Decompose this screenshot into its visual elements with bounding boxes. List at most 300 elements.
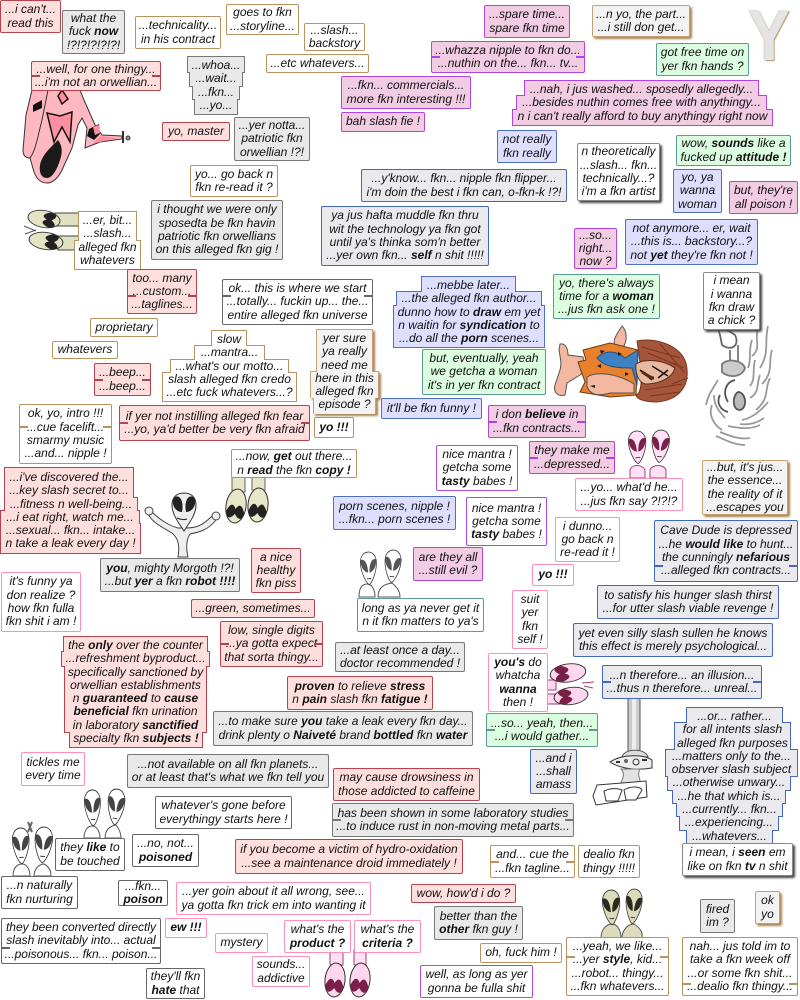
bubble: technicality: in his contract (141, 32, 215, 46)
bubble: mebbe later: ...mebbe later... (427, 278, 510, 292)
bubble: n theoretically: technically...? (583, 171, 654, 185)
bubble: hate that (146, 968, 205, 999)
bubble: go back re-read: fkn re-read it ? (195, 180, 273, 194)
bubble: long as ya (357, 598, 484, 632)
bubble: ew (165, 918, 207, 938)
bubble: draw a chick: fkn draw (709, 300, 754, 314)
bubble: gone before (155, 796, 292, 829)
tower machine with hands (593, 695, 652, 805)
bubble: green sometimes (191, 599, 315, 618)
bubble: slash backstory: backstory (309, 36, 360, 50)
bubble: yer sure (310, 329, 383, 418)
bubble: slash backstory (304, 23, 365, 51)
bubble: week off: nah... jus told im to (690, 939, 790, 953)
bubble: bah slash fie (341, 112, 425, 132)
bubble: what the fuck now: fuck now (69, 24, 118, 38)
bubble: whoa wait fkn yo: ...fkn... (198, 85, 234, 99)
bubble: what the fuck now: what the (71, 11, 116, 25)
bubble: i dunno re-read: i dunno... (563, 519, 612, 533)
bubble: er bit slash alleged: whatevers (80, 253, 135, 267)
bubble: nice mantra second (466, 497, 547, 546)
bubble: suit yer fkn self: yer (522, 605, 538, 619)
bubble: an illusion: ...n therefore... an illusion... (610, 668, 754, 682)
bubble: what's the product: product ? (290, 936, 345, 950)
bubble: or rather whatevers: ...or... rather... (697, 709, 772, 723)
bubble: sounds like attitude: fucked up attitude ! (680, 150, 787, 164)
bubble: nice mantra second: tasty babes ! (471, 527, 542, 541)
bubble: we like yer style (566, 937, 669, 996)
bubble: yo ya wanna woman: yo, ya (681, 170, 714, 184)
bubble: funny fulla shit (1, 572, 81, 632)
bubble: not really (497, 130, 557, 163)
bubble: not available: or at least that's what we fkn tell you (132, 770, 324, 784)
bubble: how'd i do: wow, how'd i do ? (417, 886, 510, 900)
bubble: ok yo intro: ...cue facelift... (27, 420, 104, 434)
bubble: time for a woman: ...jus fkn ask one ! (558, 302, 655, 316)
bubble: time for a woman: time for a woman (559, 289, 654, 303)
bubble: n yo the part (592, 5, 690, 37)
bubble: essence escapes: the essence... (708, 473, 782, 487)
bubble: etc whatevers: ...etc whatevers... (270, 56, 365, 70)
gray aliens pair (359, 549, 402, 597)
bubble: not available: ...not available on all fkn planets... (138, 757, 318, 771)
bubble: not really: not really (503, 132, 551, 146)
bubble: too many taglines (127, 269, 197, 314)
bubble: like to be touched: be touched (60, 854, 120, 868)
bubble: ok yo intro (19, 404, 112, 464)
bubble: sounds addictive (252, 956, 310, 987)
bubble: week off: ...or some fkn shit... (688, 966, 792, 980)
bubble: beep beep: ...beep... (99, 365, 146, 379)
bubble: suit yer fkn self (512, 590, 548, 649)
bubble: trick em: ...yer goin about it all wrong, see... (182, 884, 365, 898)
bubble: got free time (656, 43, 749, 76)
bubble: suit yer fkn self: suit (521, 592, 539, 606)
bubble: yer notta patriotic: ...yer notta... (239, 118, 305, 132)
bubble: cave dude depressed: Cave Dude is depressed (660, 523, 792, 537)
bubble: key slash secret: ...i eat right, watch me... (6, 510, 134, 524)
bubble: yer sure: ya really (322, 344, 367, 358)
bubble: whoa wait fkn yo: ...yo... (200, 98, 232, 112)
bubble: n theoretically: n theoretically (581, 144, 656, 158)
bubble: we like yer style: ...yeah, we like... (573, 939, 662, 953)
bubble: what's the product: what's the (291, 922, 344, 936)
bubble: fkn poison: ...fkn... (125, 879, 161, 893)
bubble: believe in contracts (488, 405, 586, 438)
bubble: refreshment byproduct: ...refreshment byproduct... (65, 651, 206, 665)
bubble: not an orwellian: ...i'm not an orwellian... (35, 75, 157, 89)
bubble: converted into poison (1, 918, 161, 964)
bubble: so right now: right... (579, 241, 612, 255)
bubble: proven stress (287, 676, 433, 710)
bubble: not anymore: not anymore... er, wait (632, 221, 751, 235)
bubble: fulla shit (420, 965, 533, 998)
bubble: yo ya wanna woman (673, 169, 722, 213)
bubble: like to be touched: they like to (60, 840, 120, 854)
bubble: yo ya wanna woman: wanna (680, 183, 715, 197)
bubble: make me depressed: they make me (534, 443, 610, 457)
bubble: essence escapes: the reality of it (708, 486, 782, 500)
bubble: or rather whatevers: for all intents slash (683, 722, 782, 736)
bubble: too many taglines: ...taglines... (131, 297, 193, 311)
caveman lying down (555, 326, 688, 402)
scribbled upside-down face (706, 326, 772, 445)
bubble: spare time: ...spare time... (489, 7, 565, 21)
bubble: long as ya: n it fkn matters to ya's (362, 614, 479, 628)
bubble: whatcha wanna: then ! (503, 695, 533, 709)
bubble: yer sure: need me (321, 358, 368, 372)
bubble: funny fulla shit: fkn shit i am ! (6, 614, 76, 628)
bubble: seen em on tv: i mean, i seen em (689, 845, 786, 859)
bubble: time for a woman (553, 274, 660, 319)
bubble: whatevers (52, 341, 118, 359)
bubble: essence escapes: ...escapes you (706, 500, 784, 514)
beige legs hanging (224, 476, 269, 524)
bubble: cue the tagline: ...fkn tagline... (495, 860, 570, 874)
bubble: ew: ew !!! (170, 920, 202, 934)
bubble: all poison: but, they're (734, 183, 793, 197)
bubble: so right now (574, 228, 617, 269)
bubble: mebbe later: ...do all the porn scenes... (399, 331, 539, 345)
bubble: nah i jus washed: n i can't really afford to buy anythingy right now (518, 109, 767, 123)
bubble: too many taglines: too... many (132, 271, 192, 285)
bubble: proprietary (90, 318, 158, 337)
bubble: dealio thingy: thingy !!!!! (583, 860, 635, 874)
bubble: fulla shit: well, as long as yer (425, 967, 528, 981)
beige feet upper left (24, 208, 80, 252)
bubble: yer sure: alleged fkn (315, 384, 374, 398)
bubble: nah i jus washed: ...besides nuthin comes free with anythingy... (522, 95, 761, 109)
bubble: merely psychological: yet even silly slash sullen he knows (579, 626, 767, 640)
bubble: may cause drowsiness: may cause drowsiness in (339, 770, 474, 784)
bubble: fired im (700, 899, 735, 933)
bubble: essence escapes: ...but, it's jus... (707, 460, 783, 474)
bubble: or rather whatevers: observer slash subject (672, 762, 791, 776)
bubble: goes to storyline (226, 4, 299, 35)
bubble: mebbe later (393, 276, 545, 348)
bubble: healthy piss: a nice (260, 550, 292, 564)
bubble: ok yo tan (755, 891, 780, 924)
bubble: proven stress: n pain slash fkn fatigue ! (292, 692, 428, 706)
bubble: refreshment byproduct: orwellian establishments (70, 678, 201, 692)
bubble: ok yo tan: ok (761, 893, 774, 907)
bubble: refreshment byproduct (61, 636, 210, 748)
bubble: nice mantra first (436, 445, 518, 491)
bubble: whatcha wanna: you's do (494, 655, 542, 669)
bubble: an illusion (602, 665, 762, 699)
bubble: yo master: yo, master (168, 124, 224, 138)
bubble: got free time: yer fkn hands ? (661, 58, 744, 72)
bubble: naturally nurturing (1, 876, 78, 909)
bubble: goes to storyline: goes to fkn (233, 5, 292, 19)
bubble: dealio thingy (578, 845, 640, 878)
bubble: or rather whatevers: ...whatevers... (692, 829, 767, 843)
bubble: cue the tagline (490, 845, 575, 878)
bubble: patriotic orwellians: i thought we were only (157, 202, 277, 216)
bubble: oh fuck him (480, 943, 562, 963)
bubble: instilling fear (119, 405, 310, 441)
bubble: porn scenes nipple: ...fkn... porn scenes ! (339, 512, 450, 526)
bubble: nice mantra first: nice mantra ! (442, 447, 512, 461)
bubble: n theoretically (577, 143, 660, 201)
bubble: take a leak (213, 711, 473, 746)
bubble: hydro-oxidation (235, 839, 463, 874)
bubble: week off (682, 937, 798, 996)
bubble: cave dude depressed: ...he would like to hunt... (659, 537, 793, 551)
bubble: instilling fear: if yer not instilling alleged fkn fear (126, 409, 303, 423)
bubble: so yeah then: ...so... yeah, then... (491, 716, 593, 730)
bubble: so yeah then (486, 713, 598, 747)
bubble: technicality (135, 16, 221, 49)
bubble: cave dude depressed (654, 520, 798, 582)
pink feet sideways (540, 662, 594, 707)
bubble: satisfy hunger: to satisfy his hunger slash thirst (604, 588, 772, 602)
bubble: long as ya: long as ya never get it (362, 601, 479, 615)
bubble: commercials: ...fkn... commercials... (348, 78, 464, 92)
bubble: getcha a woman: we getcha a woman (431, 364, 537, 378)
bubble: converted into poison: ...poisonous... fkn... poison... (5, 947, 157, 961)
bubble: cave dude depressed: the cunningly nefarious (662, 550, 790, 564)
bubble: patriotic orwellians: on this alleged fkn gig ! (156, 242, 278, 256)
bubble: fkn poison (118, 880, 168, 906)
bubble: dealio thingy: dealio fkn (583, 847, 635, 861)
bubble: better than other: other fkn guy ! (439, 922, 518, 936)
bubble: porn scenes nipple (333, 496, 456, 530)
bubble: yo pink: yo !!! (538, 567, 568, 581)
bubble: getcha a woman (422, 349, 546, 395)
bubble: fulla shit: gonna be fulla shit (428, 980, 525, 994)
bubble: technicality: ...technicality... (139, 18, 217, 32)
bubble: no not poisoned: ...no, not... (137, 836, 194, 850)
bubble: suit yer fkn self: self ! (517, 632, 543, 646)
bubble: or rather whatevers: ...he that which is... (678, 789, 780, 803)
bubble: where we start: entire alleged fkn universe (227, 308, 368, 322)
bubble: draw a chick: i mean (713, 273, 750, 287)
bubble: green sometimes: ...green, sometimes... (195, 601, 311, 615)
bubble: draw a chick (703, 272, 760, 330)
aliens pair lower left (12, 822, 53, 876)
bubble: trick em: ya gotta fkn trick em into wanting it (181, 898, 366, 912)
bubble: mighty morgoth: you, mighty Morgoth !?! (106, 561, 234, 575)
bubble: sounds addictive: addictive (257, 970, 305, 984)
bubble: suit yer fkn self: fkn (522, 618, 538, 632)
bubble: where we start: ...totally... fuckin up... the... (227, 294, 368, 308)
bubble: key slash secret: ...key slash secret to... (9, 483, 129, 497)
pink legs hanging bottom (323, 950, 372, 998)
bubble: healthy piss (251, 548, 301, 593)
bubble: slow mantra: ...etc fuck whatevers...? (166, 385, 293, 399)
bubble: tickles me: tickles me (26, 755, 80, 769)
bubble: slow mantra: ...what's our motto... (176, 359, 283, 373)
bubble: patriotic orwellians: patriotic fkn orwellians (158, 229, 276, 243)
bubble: ok yo tan: yo (761, 906, 774, 920)
bubble: where we start: ok... this is where we start (228, 281, 367, 295)
bubble: and i shall amass: ...shall (536, 764, 571, 778)
bubble: sounds like attitude: wow, sounds like a (681, 136, 786, 150)
bubble: er bit slash alleged: alleged fkn (78, 240, 137, 254)
bubble: whazza nipple (431, 41, 585, 73)
bubble: nice mantra first: getcha some (443, 460, 511, 474)
bubble: satisfy hunger: ...for utter slash viable revenge ! (603, 601, 773, 615)
bubble: hydro-oxidation: ...see a maintenance droid immediately ! (241, 856, 457, 870)
bubble: fkn funny: it'll be fkn funny ! (387, 401, 476, 415)
bubble: yer sure: yer sure (323, 331, 366, 345)
bubble: ok yo intro: smarmy music (27, 433, 104, 447)
bubble: take a leak: drink plenty o Naiveté brand bottled fkn water (219, 728, 467, 742)
bubble: mighty morgoth: ...but yer a fkn robot !!!! (105, 574, 235, 588)
bubble: beep beep (94, 363, 151, 396)
bubble: we like yer style: ...yer style, kid... (573, 952, 662, 966)
bubble: not anymore (625, 219, 758, 265)
bubble: muddle thru: ...yer own fkn... self n shit !!!!! (326, 248, 484, 262)
bubble: proven stress: proven to relieve stress (295, 679, 425, 693)
bubble: i can't read this (0, 0, 61, 33)
bubble: take a leak: ...to make sure you take a leak every fkn day... (218, 714, 468, 728)
bubble: make me depressed (529, 441, 615, 474)
bubble: once a day: doctor recommended ! (340, 656, 460, 670)
bubble: sounds like attitude (676, 135, 791, 166)
bubble: nipple flipper: i'm doin the best i fkn can, o-fkn-k !?! (366, 184, 562, 198)
bubble: yo master (162, 122, 230, 141)
bubble: trick em (176, 882, 371, 915)
bubble: whazza nipple: ...whazza nipple to fkn do... (435, 43, 581, 57)
bubble: all poison: all poison ! (735, 196, 792, 210)
bubble: nipple flipper (361, 169, 567, 202)
bubble: low single digits: ...ya gotta expect (226, 636, 317, 650)
bubble: what'd he say: ...jus fkn say ?!?!? (581, 494, 677, 508)
bubble: too many taglines: ...custom... (133, 284, 191, 298)
bubble: essence escapes (702, 460, 788, 515)
bubble: n theoretically: ...slash... fkn... (580, 158, 657, 172)
bubble: nice mantra second: getcha some (472, 514, 541, 528)
bubble: yer notta patriotic (234, 117, 310, 161)
bubble: muddle thru: ya jus hafta muddle fkn thru (331, 208, 479, 222)
bubble: n yo the part: ...i still don get... (598, 20, 684, 34)
bubble: slow mantra: ...mantra... (201, 345, 258, 359)
bubble: etc whatevers (266, 54, 369, 73)
bubble: believe in contracts: ...fkn contracts... (493, 420, 581, 434)
bubble: what the fuck now (62, 10, 125, 54)
bubble: slow mantra: slash alleged fkn credo (168, 372, 291, 386)
bubble: whoa wait fkn yo (187, 56, 245, 115)
bubble: porn scenes nipple: porn scenes, nipple ! (339, 499, 450, 513)
bubble: tickles me: every time (25, 768, 81, 782)
bubble: i dunno re-read: go back n (561, 532, 614, 546)
bubble: tickles me (21, 752, 85, 786)
bubble: an illusion: ...thus n therefore... unreal... (607, 681, 757, 695)
bubble: key slash secret: ...i've discovered the... (9, 470, 128, 484)
bubble: converted into poison: they been converted directly (6, 920, 156, 934)
bubble: what's the criteria (354, 920, 421, 953)
bubble: goes to storyline: ...storyline... (230, 18, 295, 32)
bubble: gone before: whatever's gone before (161, 798, 286, 812)
bubble: go back re-read: yo... go back n (195, 167, 273, 181)
bubble: spare time (484, 5, 570, 38)
bubble: whatevers: whatevers (58, 342, 112, 356)
bubble: time for a woman: yo, there's always (559, 276, 654, 290)
bubble: not an orwellian (31, 61, 161, 91)
bubble: patriotic orwellians (151, 200, 283, 260)
bubble: nipple flipper: ...y'know... fkn... nipple fkn flipper... (371, 171, 557, 185)
bubble: or rather whatevers: ...matters only to the... (672, 749, 791, 763)
bubble: ok yo intro: ...and... nipple ! (24, 446, 107, 460)
bubble: muddle thru (321, 206, 489, 266)
bubble: yer sure: episode ? (318, 397, 371, 411)
bubble: or rather whatevers (665, 707, 798, 843)
bubble: slow mantra: slow (217, 332, 241, 346)
bubble: sounds addictive: sounds... (257, 957, 305, 971)
bubble: key slash secret (0, 467, 141, 554)
beige aliens pair (601, 888, 643, 938)
bubble: go back re-read (190, 165, 278, 197)
bubble: read the copy: ...now, get out there... (236, 449, 352, 463)
bubble: n theoretically: i'm a fkn artist (582, 184, 655, 198)
bubble: whatcha wanna (488, 653, 548, 712)
bubble: what'd he say: ...yo... what'd he... (580, 480, 678, 494)
bubble: n yo the part: ...n yo, the part... (596, 7, 686, 21)
bubble: getcha a woman: it's in yer fkn contract (428, 378, 540, 392)
bubble: funny fulla shit: don realize ? (7, 588, 75, 602)
bubble: commercials (341, 76, 471, 109)
bubble: yo (314, 417, 354, 438)
bubble: laboratory studies: ...to induce rust in non-moving metal parts... (336, 819, 570, 833)
bubble: bah slash fie: bah slash fie ! (346, 114, 420, 128)
bubble: funny fulla shit: it's funny ya (10, 574, 72, 588)
bubble: refreshment byproduct: specifically sanctioned by (68, 665, 203, 679)
bubble: healthy piss: healthy (257, 563, 295, 577)
bubble: laboratory studies (332, 803, 574, 837)
bubble: nah i jus washed (512, 80, 773, 126)
bubble: draw a chick: a chick ? (708, 313, 755, 327)
bubble: beep beep: ...beep... (99, 378, 146, 392)
bubble: fired im: fired (706, 902, 729, 916)
bubble: refreshment byproduct: in laboratory sanctified (73, 718, 198, 732)
bubble: what's the criteria: what's the (361, 922, 414, 936)
bubble: funny fulla shit: how fkn fulla (8, 601, 74, 615)
pink aliens standing (628, 429, 670, 478)
bubble: read the copy (231, 449, 357, 478)
bubble: whoa wait fkn yo: ...wait... (195, 71, 237, 85)
bubble: refreshment byproduct: specialty fkn subjects ! (73, 731, 199, 745)
bubble: seen em on tv: like on fkn tv n shit (687, 858, 788, 872)
bubble: whatcha wanna: wanna (499, 682, 537, 696)
bubble: week off: ...dealio fkn thingy... (687, 979, 793, 993)
bubble: hate that: they'll fkn (151, 969, 200, 983)
bubble: oh fuck him: oh, fuck him ! (485, 945, 557, 959)
bubble: may cause drowsiness (333, 768, 480, 801)
bubble: instilling fear: ...yo, ya'd better be very fkn afraid (124, 422, 305, 436)
bubble: i dunno re-read (555, 517, 620, 562)
aliens pair lower left upper (84, 788, 126, 838)
bubble: week off: take a fkn week off (690, 952, 790, 966)
bubble: laboratory studies: has been shown in some laboratory studies (338, 806, 568, 820)
bubble: yer notta patriotic: orwellian !?! (240, 145, 304, 159)
bubble: all poison (729, 181, 798, 214)
alien morgoth arms raised (145, 493, 220, 557)
bubble: mighty morgoth (100, 558, 240, 592)
bubble: er bit slash alleged: ...slash... (83, 226, 132, 240)
bubble: key slash secret: n take a leak every day ! (5, 536, 136, 550)
bubble: low single digits (220, 621, 323, 667)
bubble: satisfy hunger (597, 585, 779, 619)
bubble: refreshment byproduct: n guaranteed to cause (73, 691, 198, 705)
bubble: i dunno re-read: re-read it ! (560, 545, 615, 559)
bubble: naturally nurturing: ...n naturally (7, 878, 72, 892)
bubble: read the copy: n read the fkn copy ! (237, 462, 351, 476)
bubble: getcha a woman: but, eventually, yeah (429, 351, 539, 365)
bubble: mebbe later: ...the alleged fkn author... (402, 291, 536, 305)
bubble: mebbe later: n waitin for syndication to (398, 318, 540, 332)
